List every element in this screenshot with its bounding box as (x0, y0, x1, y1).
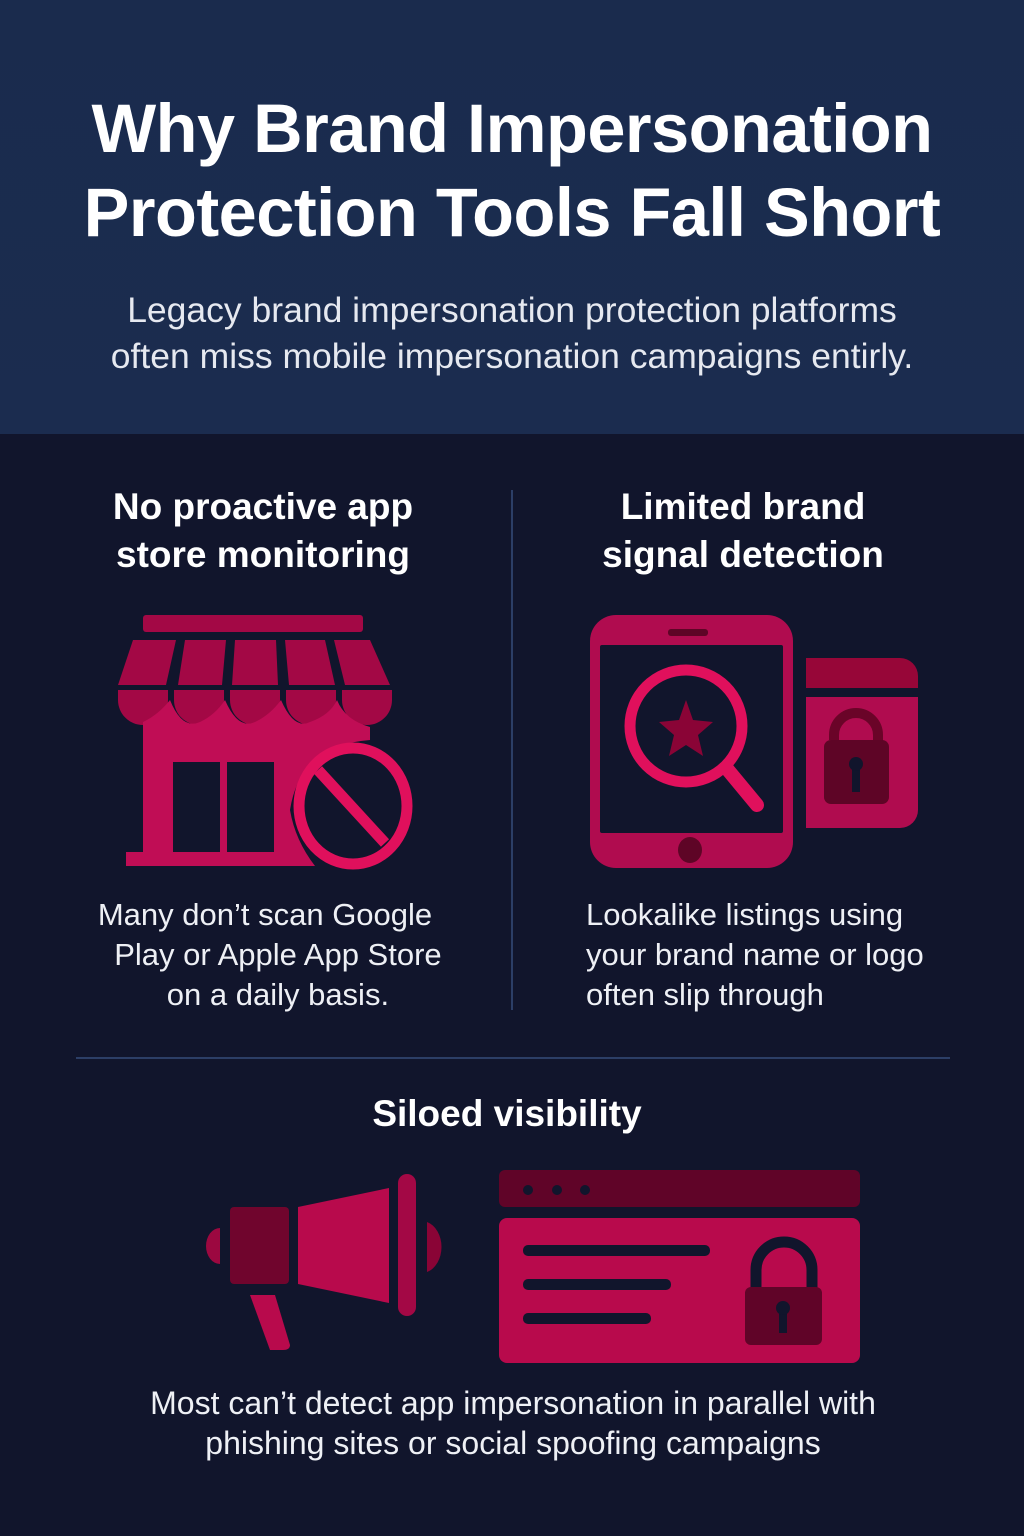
heading: no proactive monitoring: No proactive app (113, 486, 413, 527)
heading: limited signal detection (602, 486, 884, 575)
heading: no proactive monitoring (113, 486, 413, 575)
text: lookalike description: your brand name or logo (586, 937, 924, 972)
icon: store with prohibition sign (118, 615, 407, 866)
text: store description: Play or Apple App Store (114, 937, 442, 972)
icon: browser window with lock (499, 1170, 860, 1363)
heading: siloed visibility: Siloed visibility (372, 1093, 642, 1134)
heading: limited signal detection: Limited brand (621, 486, 865, 527)
title (84, 90, 940, 251)
subtitle: Legacy brand impersonation protection platforms (127, 290, 897, 330)
header panel (0, 0, 1024, 434)
text: store description: Many don’t scan Google (98, 897, 432, 932)
text: lookalike description: Lookalike listings using (586, 897, 903, 932)
text: lookalike description: often slip through (586, 977, 824, 1012)
title: Protection Tools Fall Short (84, 174, 940, 251)
text: siloed description: Most can’t detect app impersonation in parallel with (150, 1385, 876, 1421)
heading: limited signal detection: signal detection (602, 534, 884, 575)
text: store description (98, 897, 442, 1012)
icon: phone with magnifier and lock card (590, 615, 918, 868)
text: store description: on a daily basis. (167, 977, 389, 1012)
text: lookalike description (586, 897, 924, 1012)
subtitle: often miss mobile impersonation campaigns entirly. (111, 336, 913, 376)
heading: no proactive monitoring: store monitoring (116, 534, 410, 575)
text: siloed description: phishing sites or social spoofing campaigns (205, 1425, 821, 1461)
title: Why Brand Impersonation (91, 90, 932, 167)
subtitle (111, 290, 913, 376)
icon: megaphone (206, 1174, 442, 1350)
text: siloed description (150, 1385, 876, 1461)
